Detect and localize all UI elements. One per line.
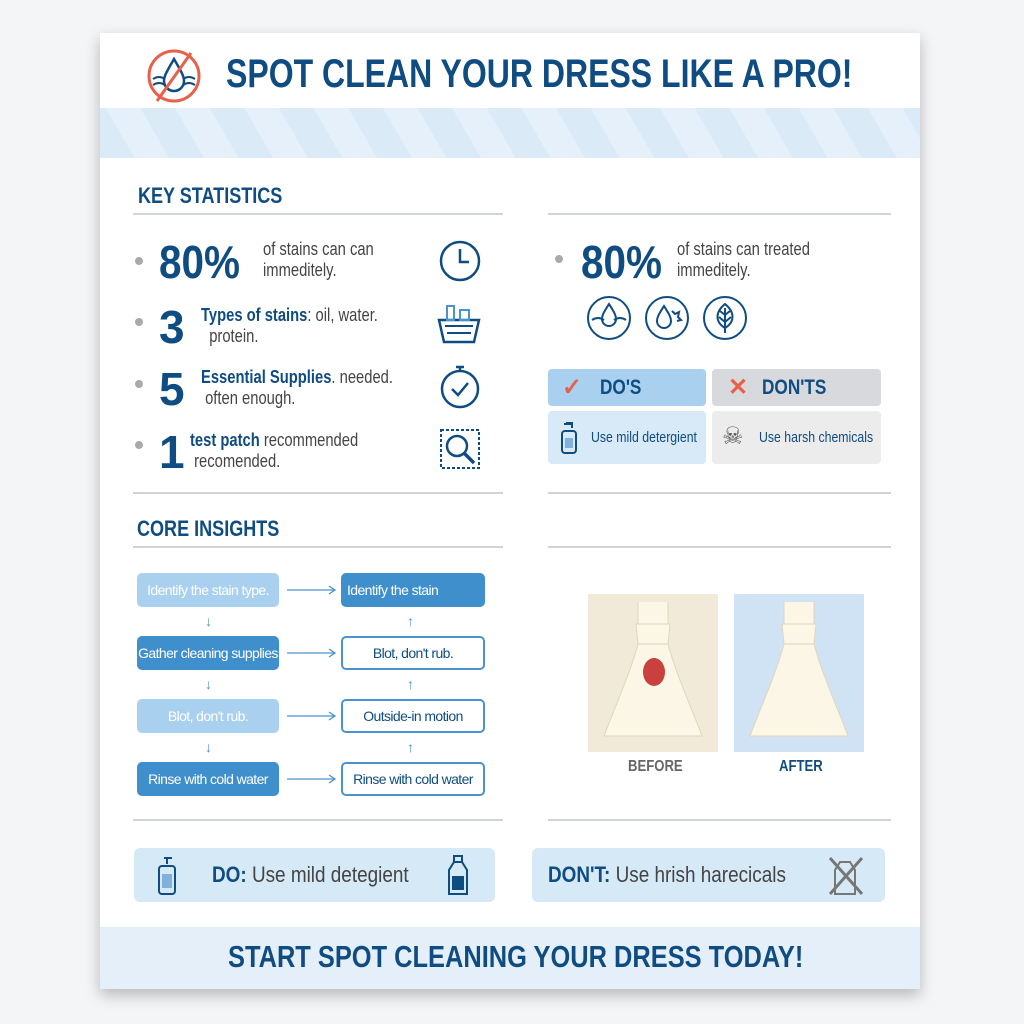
right stat: immeditely. [677, 260, 751, 280]
flow chart [137, 573, 485, 796]
stat 1: recomended. [194, 451, 280, 471]
stat 3: protein. [209, 326, 258, 346]
flow chart: ↑ [407, 613, 414, 629]
pattern band [100, 108, 920, 158]
before image [588, 594, 718, 752]
dont banner [532, 848, 885, 902]
stat 80%: 80% [159, 236, 240, 288]
header icon: no water [148, 50, 200, 102]
title: SPOT CLEAN YOUR DRESS LIKE A PRO! [226, 52, 852, 96]
footer cta: START SPOT CLEANING YOUR DRESS TODAY! [228, 939, 803, 974]
flow chart: Identify the stain [347, 582, 438, 598]
footer cta [100, 927, 920, 989]
flow chart: Rinse with cold water [353, 771, 473, 787]
card [100, 33, 920, 989]
stat 3 [135, 301, 481, 353]
flow chart: Rinse with cold water [148, 771, 268, 787]
stat 80% [135, 236, 480, 288]
stat 5: often enough. [205, 388, 295, 408]
icon basket [437, 305, 481, 344]
after label: AFTER [779, 758, 823, 775]
icon stopwatch [440, 366, 480, 408]
flow chart: Blot, don't rub. [168, 708, 248, 724]
donts panel: Use harsh chemicals [759, 429, 873, 446]
right stat: of stains can treated [677, 239, 810, 259]
do banner: DO: Use mild detegient [212, 862, 409, 887]
stat 1 [135, 426, 480, 478]
flow chart: Identify the stain type. [147, 582, 269, 598]
flow chart: ↓ [205, 676, 212, 692]
stats list [135, 236, 481, 478]
right stat [555, 236, 810, 288]
stat 1: test patch recommended [190, 430, 358, 450]
heading: core insights: CORE INSIGHTS [137, 516, 279, 541]
stat 80%: of stains can can [263, 239, 374, 259]
dos panel: ✓ [562, 374, 582, 401]
flow chart: Gather cleaning supplies [138, 645, 278, 661]
flow chart: Blot, don't rub. [373, 645, 453, 661]
do banner [134, 848, 495, 902]
stat 5: Essential Supplies. needed. [201, 367, 393, 387]
dos panel: Use mild detergient [591, 429, 697, 446]
icon magnifier [440, 429, 480, 469]
flow chart: ↓ [205, 739, 212, 755]
before label: BEFORE [628, 758, 683, 775]
flow chart: ↑ [407, 676, 414, 692]
dont banner: DON'T: Use hrish harecicals [548, 862, 786, 887]
icon clock [440, 240, 480, 282]
horizontal arrows [287, 586, 336, 784]
heading: key statistics: KEY STATISTICS [138, 183, 282, 208]
flow chart: Outside-in motion [363, 708, 463, 724]
donts panel: DON'TS [762, 376, 826, 399]
flow chart: ↑ [407, 739, 414, 755]
donts panel: ☠ [722, 423, 744, 450]
stat 3: 3 [159, 301, 185, 353]
dos panel [548, 369, 706, 464]
stat 3: Types of stains: oil, water. [201, 305, 378, 325]
stat 1: 1 [159, 426, 185, 478]
dos panel: DO'S [600, 376, 641, 399]
stat 80%: immeditely. [263, 260, 337, 280]
stat 5 [135, 363, 480, 415]
stat 5: 5 [159, 363, 185, 415]
after image [734, 594, 864, 752]
donts panel [712, 369, 881, 464]
right stat: 80% [581, 236, 662, 288]
flow chart: ↓ [205, 613, 212, 629]
icon row [587, 296, 747, 340]
donts panel: ✕ [728, 374, 748, 401]
